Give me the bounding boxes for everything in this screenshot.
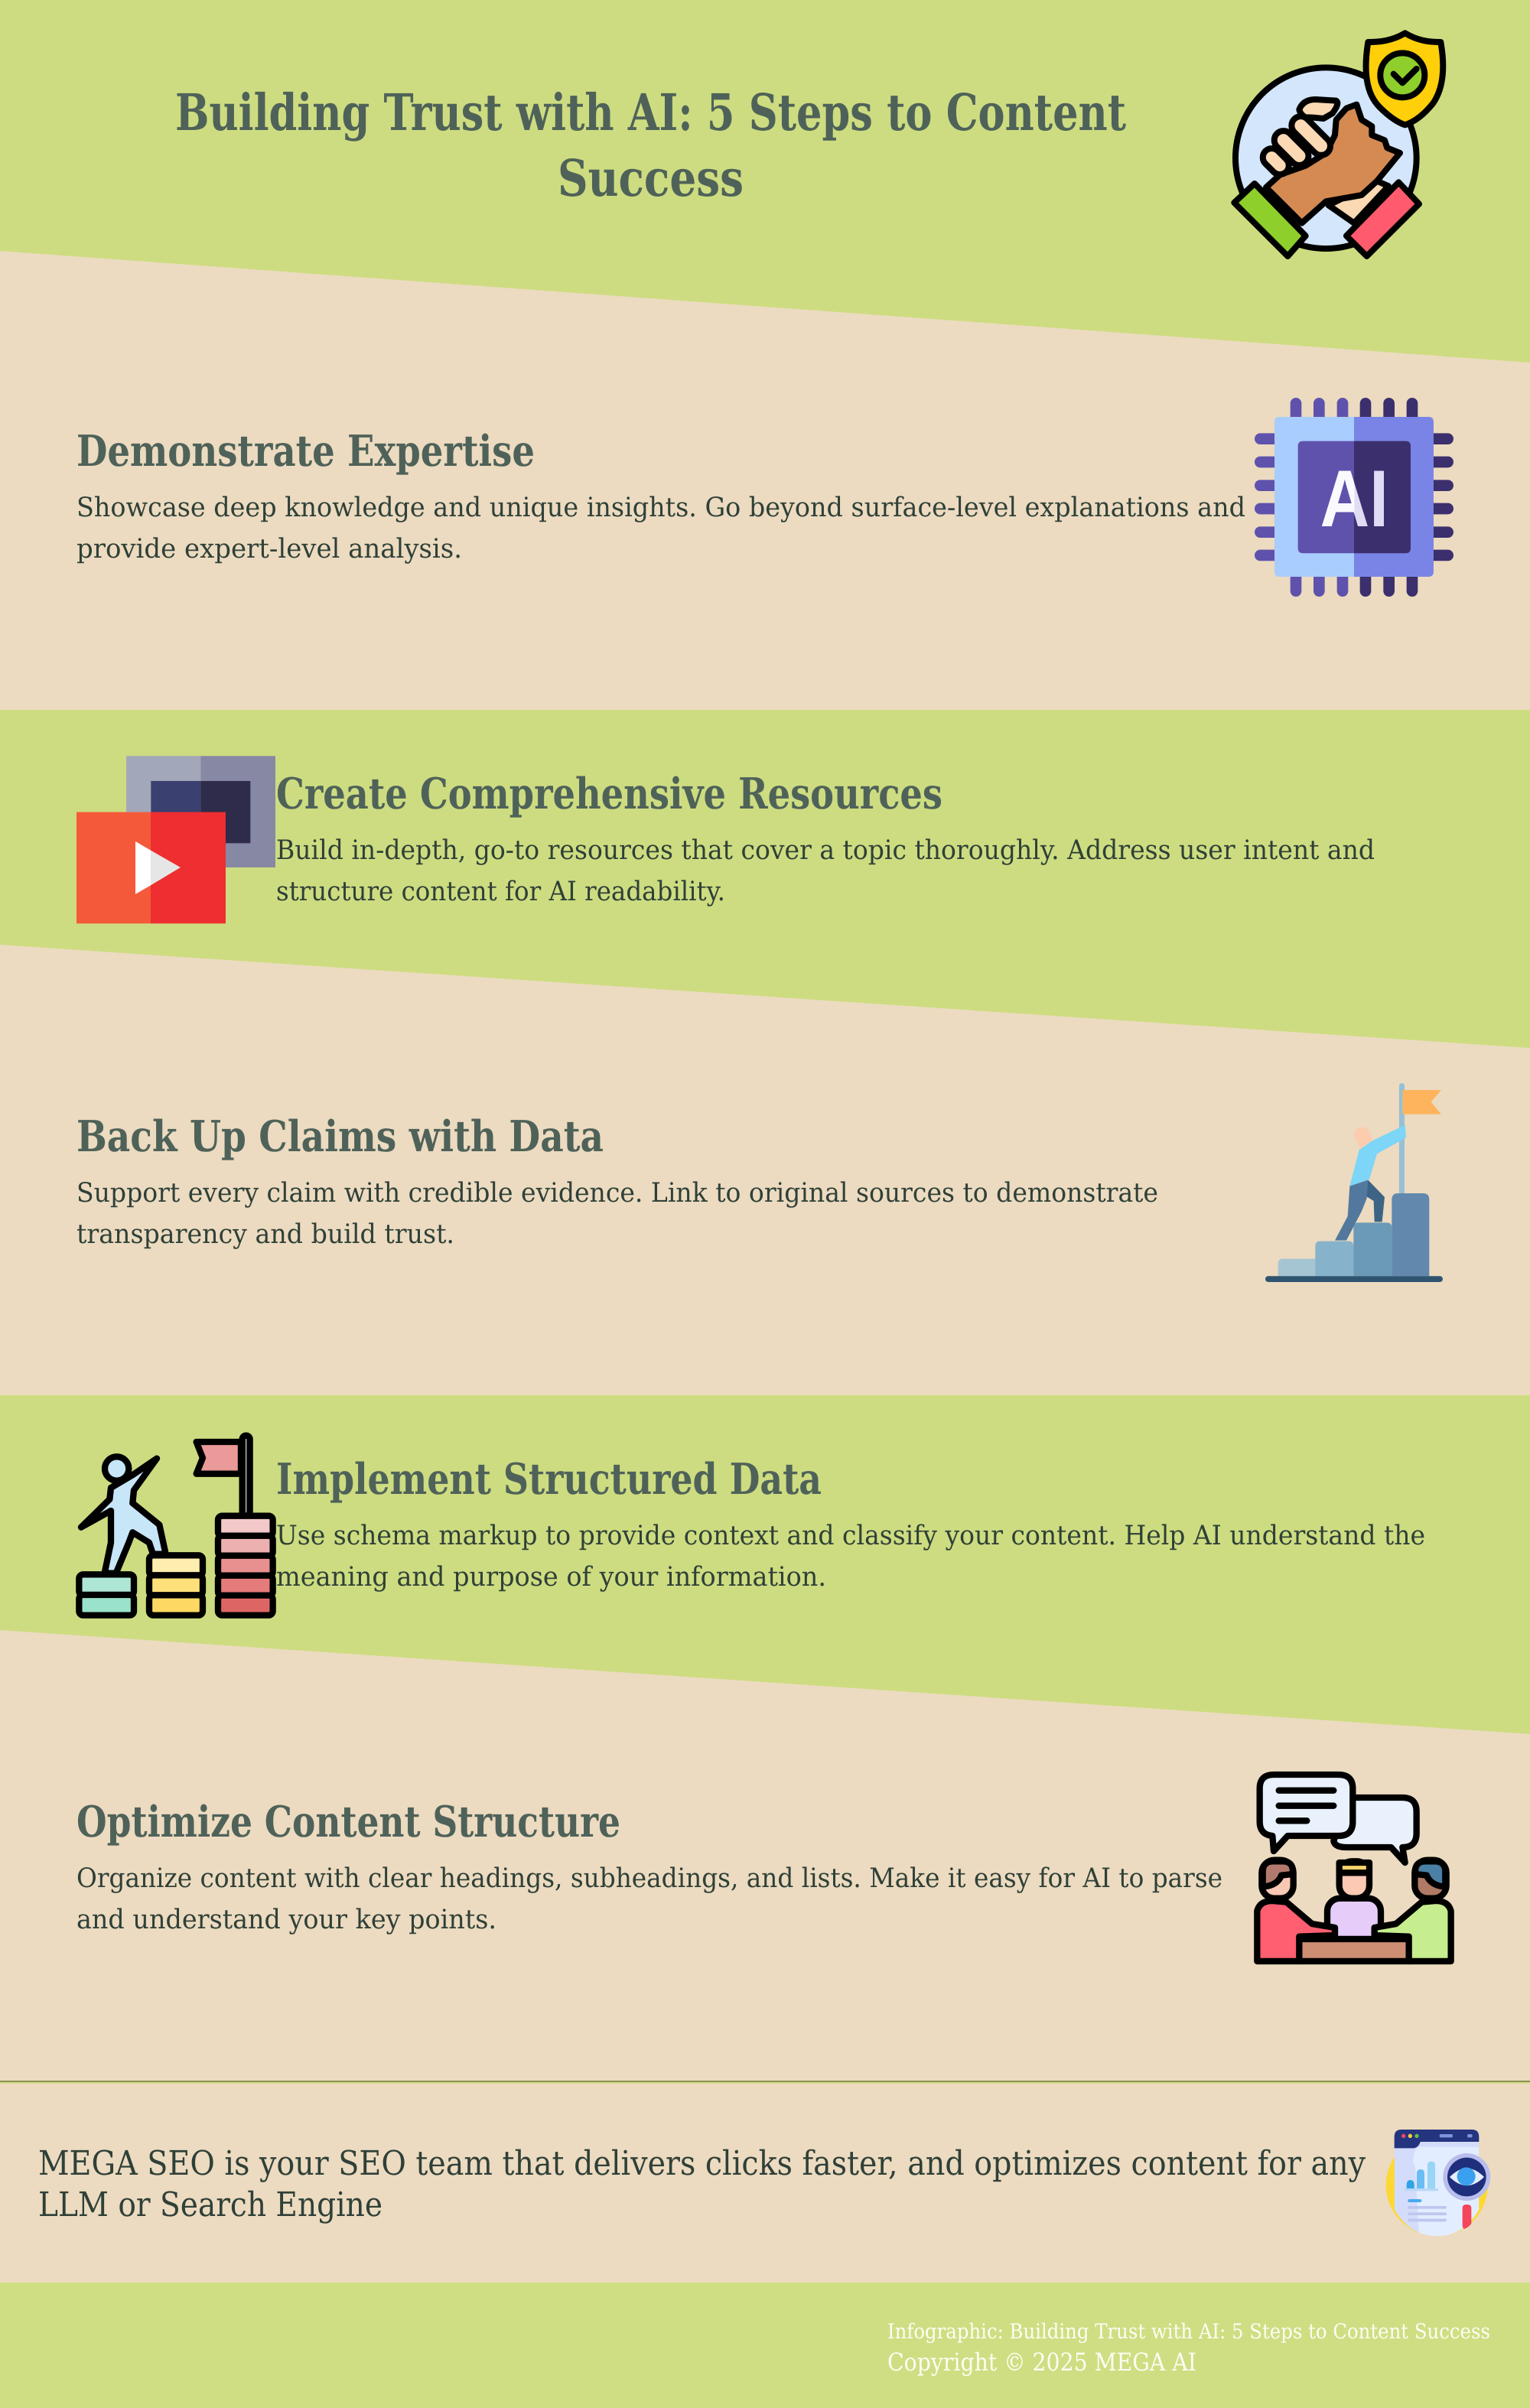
promo text: LLM or Search Engine [38, 2185, 382, 2224]
icon: report with eye magnifier [1386, 2130, 1490, 2237]
panel: call to action [38, 2130, 1490, 2237]
title: Building Trust with AI: 5 Steps to Content [175, 83, 1126, 142]
icon: person climbing stacked blocks [79, 1436, 273, 1616]
body text [76, 1178, 1158, 1250]
header band [0, 0, 1530, 363]
icon: handshake with shield [1234, 33, 1443, 256]
icon: AI chip: AI [1320, 454, 1388, 543]
copyright: Copyright © 2025 MEGA AI [887, 2348, 1196, 2377]
body text: provide expert-level analysis. [76, 534, 462, 565]
title [175, 83, 1126, 208]
body text: Use schema markup to provide context and classify your content. Help AI understand the [276, 1521, 1425, 1551]
body text [76, 493, 1245, 565]
body text: transparency and build trust. [76, 1219, 454, 1250]
icon: video player [76, 756, 275, 923]
panel: Demonstrate Expertise [76, 398, 1454, 597]
heading: Optimize Content Structure [76, 1797, 620, 1847]
icon: AI chip [1255, 398, 1454, 597]
heading: Demonstrate Expertise [76, 426, 535, 477]
panel: footer [0, 2283, 1530, 2408]
divider line [0, 2081, 1530, 2084]
promo text [38, 2144, 1366, 2224]
panel: header [0, 0, 1530, 363]
panel: Create Comprehensive Resources [0, 710, 1530, 1048]
heading: Back Up Claims with Data [76, 1111, 604, 1162]
section band [0, 1395, 1530, 1734]
body text [276, 1521, 1425, 1593]
icon: team meeting with speech bubbles [1257, 1775, 1451, 1961]
body text: Organize content with clear headings, subheadings, and lists. Make it easy for AI to parse [76, 1863, 1222, 1894]
body text [76, 1863, 1222, 1935]
body text: and understand your key points. [76, 1905, 496, 1935]
section band [0, 710, 1530, 1048]
body text [276, 835, 1375, 907]
heading: Implement Structured Data [276, 1454, 822, 1505]
panel: Optimize Content Structure [76, 1775, 1451, 1961]
footer band [0, 2283, 1530, 2408]
icon: climber with flag [1265, 1083, 1443, 1282]
body text: structure content for AI readability. [276, 877, 725, 907]
title: Success [558, 148, 744, 208]
body text: Showcase deep knowledge and unique insights. Go beyond surface-level explanations and [76, 493, 1245, 523]
panel: Implement Structured Data [0, 1395, 1530, 1734]
heading: Create Comprehensive Resources [276, 769, 942, 819]
panel: Back Up Claims with Data [76, 1083, 1443, 1282]
body text: Support every claim with credible evidence. Link to original sources to demonstrate [76, 1178, 1158, 1209]
body text: meaning and purpose of your information. [276, 1562, 826, 1593]
promo text: MEGA SEO is your SEO team that delivers clicks faster, and optimizes content for any [38, 2144, 1366, 2183]
body text: Build in-depth, go-to resources that cover a topic thoroughly. Address user intent and [276, 835, 1375, 866]
